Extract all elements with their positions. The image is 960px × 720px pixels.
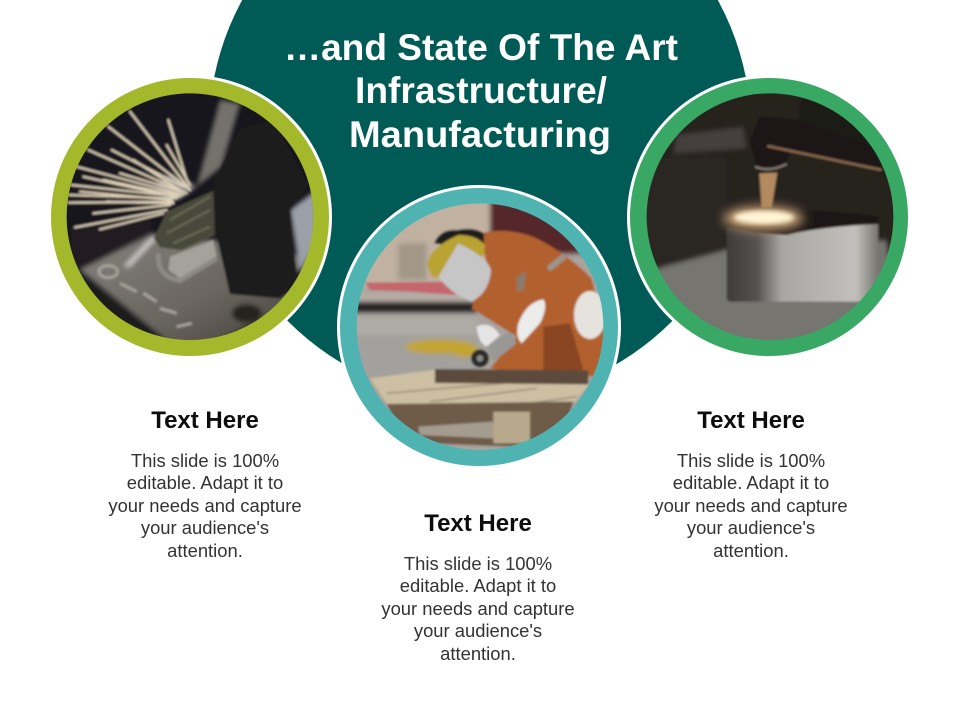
title: …and State Of The Art <box>284 27 678 68</box>
text block: left <box>108 407 302 561</box>
panel: left welding photo circle <box>48 75 332 359</box>
text block: left: your audience's <box>141 517 269 538</box>
text block: center: editable. Adapt it to <box>400 575 556 596</box>
text block: left: your needs and capture <box>108 495 302 516</box>
panel: center grinding worker photo circle <box>337 185 621 469</box>
text block: center: Text Here <box>424 510 532 537</box>
text block: left: editable. Adapt it to <box>127 472 283 493</box>
title: Infrastructure/ <box>355 70 607 111</box>
text block: left: Text Here <box>151 407 259 434</box>
title <box>284 27 678 155</box>
text block: center: attention. <box>440 643 516 664</box>
text block: right: This slide is 100% <box>677 450 825 471</box>
text block: center: This slide is 100% <box>404 553 552 574</box>
text block: right: your needs and capture <box>654 495 848 516</box>
photo: welding sparks and glove <box>60 90 320 350</box>
photo: torch heating a metal cylinder <box>640 90 900 350</box>
big dark green semicircle background <box>209 0 751 401</box>
text block: center <box>381 510 575 664</box>
text block: right <box>654 407 848 561</box>
panel: right torch photo circle <box>627 75 911 359</box>
text block: right: Text Here <box>697 407 805 434</box>
text block: center: your audience's <box>414 620 542 641</box>
photo: worker grinding a wooden pallet <box>350 200 610 460</box>
title: Manufacturing <box>349 114 611 155</box>
text block: left: This slide is 100% <box>131 450 279 471</box>
text block: center: your needs and capture <box>381 598 575 619</box>
text block: right: your audience's <box>687 517 815 538</box>
text block: right: attention. <box>713 540 789 561</box>
text block: left: attention. <box>167 540 243 561</box>
text block: right: editable. Adapt it to <box>673 472 829 493</box>
